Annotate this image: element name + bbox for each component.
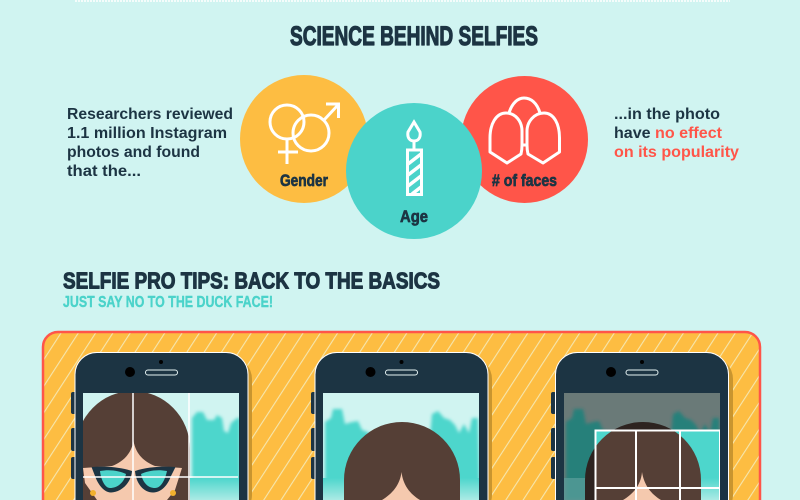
label: gender: Gender [280,172,328,190]
intro text: that the... [67,163,141,180]
circle: gender [240,75,368,203]
panel: pro tips [43,332,760,500]
top dotted divider [75,0,730,2]
section subheading: JUST SAY NO TO THE DUCK FACE! [63,294,273,311]
outro text: on its popularity [614,144,739,161]
section heading: SELFIE PRO TIPS: BACK TO THE BASICS [63,268,440,294]
icon: gender symbols [270,104,338,164]
outro text: ...in the photo [614,106,720,123]
phone 1: tight crop [71,352,252,500]
phone 2: full head [311,352,492,500]
intro text [67,106,233,180]
intro text: Researchers reviewed [67,106,233,123]
circle: age [346,103,482,239]
outro text: have no effect [614,125,723,142]
label: faces: # of faces [492,172,557,190]
outro text [614,106,739,161]
circle: number of faces [461,76,588,203]
title: SCIENCE BEHIND SELFIES [290,21,538,51]
intro text: photos and found [67,144,200,161]
icon: candle [408,122,422,194]
icon: overlapping faces [490,98,560,163]
phone 3: rule of thirds crop [551,352,733,500]
label: age: Age [400,207,428,226]
intro text: 1.1 million Instagram [67,125,227,142]
